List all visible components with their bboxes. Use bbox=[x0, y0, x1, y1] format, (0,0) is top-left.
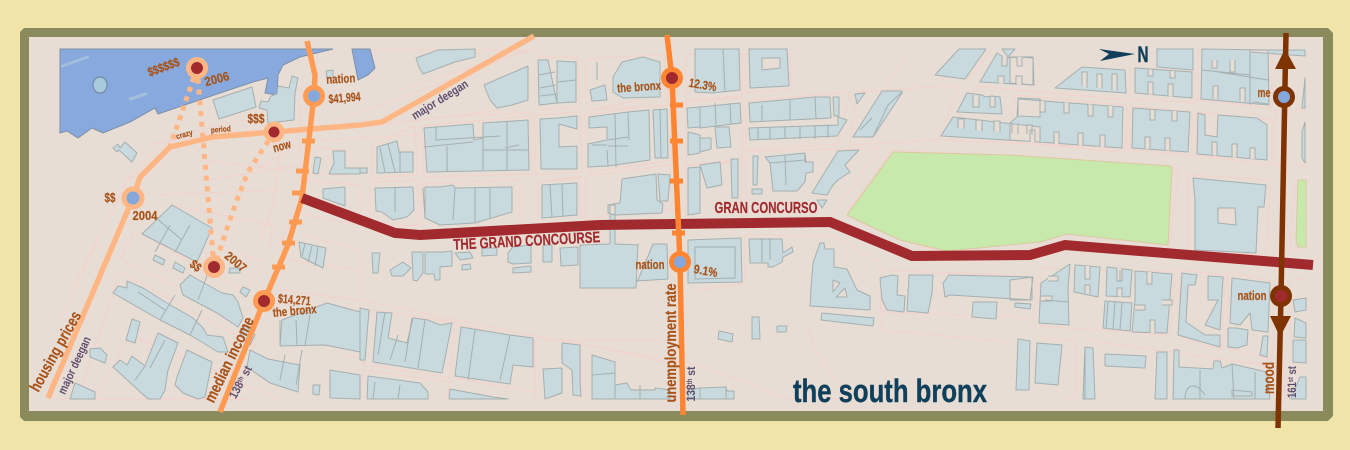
buildings: central blocks bbox=[360, 49, 700, 399]
north arrow bbox=[1099, 42, 1148, 67]
labels: street names: major deegan bbox=[55, 334, 94, 396]
labels: median income bbox=[202, 71, 361, 406]
labels: housing prices: $$ bbox=[104, 191, 116, 205]
buildings: east-centre blocks bbox=[688, 49, 986, 399]
median income line bbox=[220, 41, 315, 412]
labels: street names: major deegan bbox=[409, 77, 471, 123]
labels: housing prices: $$$$$$ bbox=[146, 55, 182, 79]
marker: housing 2006 bbox=[188, 60, 206, 76]
marker: unemployment bronx bbox=[664, 70, 680, 86]
labels: housing prices: period bbox=[210, 124, 231, 135]
labels: housing prices: $$ bbox=[187, 257, 204, 275]
labels: unemployment rate bbox=[617, 76, 719, 403]
labels: unemployment rate: 12.3% bbox=[688, 76, 718, 94]
labels: housing prices: 2006 bbox=[203, 69, 231, 89]
labels: housing prices: now bbox=[271, 137, 293, 155]
unemployment rate line bbox=[667, 35, 685, 415]
marker: housing 2007 bbox=[206, 258, 222, 276]
labels: unemployment rate: unemployment rate bbox=[663, 283, 680, 402]
the grand concourse road bbox=[302, 198, 1313, 265]
labels: street names bbox=[55, 77, 1299, 402]
map ground bbox=[29, 37, 1323, 411]
labels: mood bbox=[1238, 86, 1278, 394]
labels: grand concourse: THE GRAND CONCOURSE bbox=[453, 229, 601, 254]
labels: median income: $41,994 bbox=[328, 90, 361, 106]
labels: street names: 161 bbox=[1285, 378, 1299, 398]
marker: mood me bbox=[1276, 88, 1292, 106]
labels: housing prices: 2007 bbox=[222, 249, 249, 275]
labels: housing prices bbox=[27, 55, 293, 395]
labels: median income: the bronx bbox=[272, 302, 317, 320]
labels: housing prices: 2004 bbox=[132, 209, 158, 223]
labels: street names: st bbox=[684, 366, 698, 379]
labels: street names: th bbox=[687, 379, 694, 384]
marker: unemployment nation bbox=[672, 254, 688, 270]
labels: grand concourse: GRAN CONCURSO bbox=[714, 200, 818, 217]
buildings: east blocks bbox=[880, 49, 1306, 399]
marker: income bronx bbox=[256, 292, 272, 310]
dotted housing links bbox=[170, 68, 274, 267]
labels: street names: st bbox=[1285, 366, 1299, 377]
labels: median income: median income bbox=[202, 314, 258, 406]
mood line bbox=[1270, 33, 1296, 428]
park bbox=[847, 152, 1306, 251]
marker: housing now bbox=[266, 124, 282, 140]
labels: unemployment rate: the bronx bbox=[617, 78, 661, 96]
labels: street names: 138 bbox=[684, 381, 698, 402]
buildings: west blocks bbox=[70, 70, 360, 399]
arrow down bbox=[1270, 316, 1291, 337]
marker: income nation bbox=[306, 88, 322, 104]
arrow up bbox=[1275, 49, 1296, 69]
labels: street names: st bbox=[237, 363, 255, 381]
building courtyard notches bbox=[958, 56, 1255, 333]
marker: mood nation bbox=[1272, 288, 1290, 304]
labels: unemployment rate: nation bbox=[636, 258, 664, 272]
north arrow: N bbox=[1138, 42, 1148, 67]
labels: street names: st bbox=[1288, 377, 1295, 382]
labels: mood: nation bbox=[1238, 289, 1266, 303]
labels: street names: 138 bbox=[226, 377, 248, 401]
labels: housing prices: crazy bbox=[175, 128, 194, 141]
labels: housing prices: $$$ bbox=[248, 112, 265, 126]
labels: median income: nation bbox=[326, 71, 356, 87]
labels: median income: $14,271 bbox=[277, 292, 311, 308]
title: the south bronx bbox=[793, 373, 987, 409]
marker: housing 2004 bbox=[124, 189, 142, 207]
labels: housing prices: housing prices bbox=[27, 309, 85, 395]
labels: unemployment rate: 9.1% bbox=[693, 262, 719, 280]
labels: street names: th bbox=[237, 375, 246, 384]
river bbox=[60, 49, 375, 138]
street network bbox=[60, 50, 1306, 400]
housing prices line bbox=[48, 36, 534, 398]
labels: grand concourse bbox=[453, 200, 818, 254]
labels: mood: me bbox=[1258, 86, 1271, 100]
labels: mood: mood bbox=[1261, 362, 1278, 394]
